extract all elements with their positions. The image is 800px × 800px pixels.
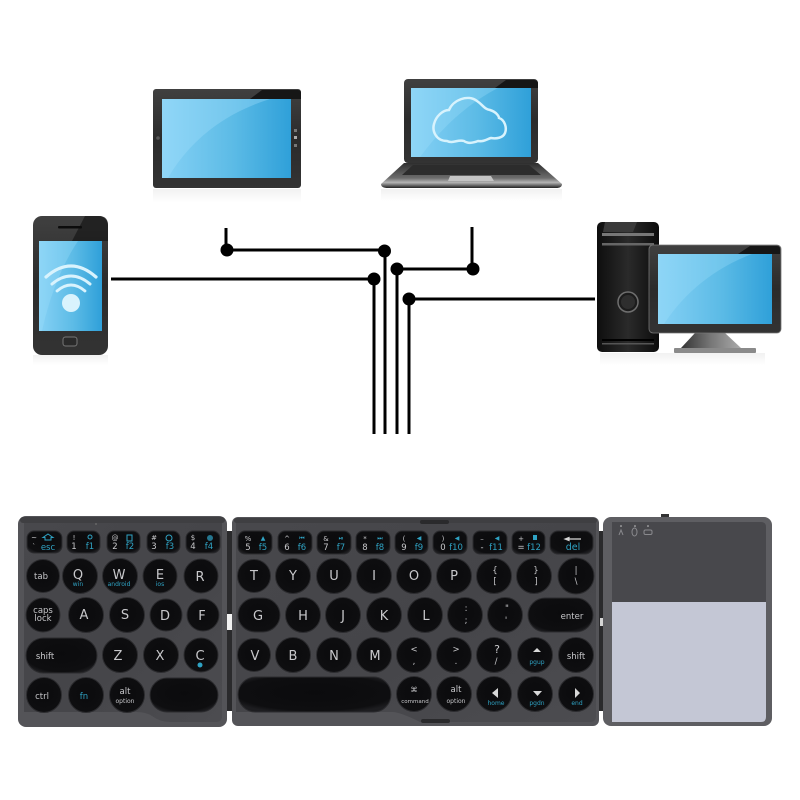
cloud outline [434,98,506,143]
function key row: f1 [86,542,94,552]
function key row: ⏯ [339,535,344,542]
key row: tab to R [26,558,218,594]
function key row: ⏭ [377,535,383,542]
function key row: # [151,534,157,542]
key row: tab to R: E [156,568,164,583]
key row: V to shift [238,638,594,672]
key row: space to arrows: alt [451,685,462,695]
icon: tablet [153,89,301,203]
key row: T to backslash: Y [288,569,297,584]
icon: smartphone with wifi [33,216,108,365]
key row: shift to C [26,638,218,673]
key row: shift to C: X [156,649,165,664]
key row: shift to C: Z [114,649,123,664]
key row: G to enter: ' [505,616,507,626]
key row: G to enter: J [340,609,345,624]
key row: ctrl to space: fn [80,692,88,702]
key row: T to backslash: I [372,569,376,584]
function key row: f9 [415,543,423,553]
function key row: f7 [337,543,345,553]
status indicators [619,525,652,536]
function key row: @ [112,534,118,542]
function key row: f10 [449,543,463,553]
key row: G to enter: : [465,604,467,614]
key row: G to enter: K [380,609,389,624]
key row: tab to R: ios [156,581,164,588]
key row: caps lock to F: S [121,608,129,623]
key row: caps lock to F [26,598,219,632]
key row: tab to R: win [73,581,83,588]
function key row: ◀ [495,535,500,542]
key row: space to arrows: command [401,699,429,705]
function key row: * [363,535,367,543]
key row: T to backslash: ] [534,577,538,587]
function key row: f2 [126,542,134,552]
panel: left keyboard section [18,516,227,727]
panel: touchpad section [603,514,772,726]
function key row: del [566,542,580,553]
function key row: f12 [527,543,541,553]
function key row: 2 [112,542,118,552]
function key row: 0 [440,543,446,553]
function key row: = [517,543,525,553]
key row: T to backslash: T [249,569,258,584]
key row: V to shift: . [455,657,457,667]
key row: G to enter: " [505,604,509,614]
key row: caps lock to F: lock [34,614,52,624]
key row: caps lock to F: F [198,609,206,624]
function key row: $ [191,534,195,542]
function key row: ! [73,534,75,542]
key row: shift to C: shift [36,652,55,662]
function key row: f3 [166,542,174,552]
icon: desktop tower and monitor [597,222,781,365]
key row: space to arrows: home [487,700,505,707]
key row: tab to R: W [113,568,126,583]
function key row: f4 [205,542,213,552]
function key row: ▲ [261,535,266,542]
wifi symbol [46,266,96,312]
folding keyboard [18,514,772,727]
key row: V to shift: / [495,657,498,667]
function key row: % [245,535,252,543]
key row: caps lock to F: D [160,609,170,624]
key row: tab to R: android [108,581,131,588]
key row: G to enter: G [253,609,263,624]
function key row: 9 [401,543,407,553]
function key row: ) [442,535,445,543]
key row: ctrl to space: alt [120,687,131,697]
key row: caps lock to F: caps [33,606,53,616]
function key row: esc [41,543,55,553]
function key row: 4 [190,542,196,552]
key row: T to backslash: P [450,569,458,584]
key row: V to shift: B [289,649,297,664]
key row: tab to R: Q [73,568,83,583]
key row: caps lock to F: A [80,608,89,623]
function key row: 5 [245,543,251,553]
key row: V to shift: N [329,649,339,664]
key row: ctrl to space [26,678,218,712]
key row: V to shift: ? [494,643,500,656]
key row: ctrl to space: option [116,698,135,705]
function key row: f6 [298,543,306,553]
function key row: ^ [284,535,290,543]
key row: space to arrows [238,676,594,712]
function key row: – [480,535,484,543]
function key row: - [480,543,484,553]
function key row [238,531,593,554]
function key row: 1 [71,542,77,552]
key row: T to backslash: [ [493,577,497,587]
key row: shift to C: C [195,649,205,664]
function key row: 7 [323,543,329,553]
key row: G to enter: H [298,609,308,624]
function key row: 6 [284,543,290,553]
key row: V to shift: , [413,657,415,667]
key row: T to backslash: \ [575,577,578,587]
key row: V to shift: pgup [529,659,545,666]
function key row: & [323,535,329,543]
function key row: ◀ [417,535,422,542]
function key row: + [518,535,524,543]
key row: space to arrows: option [447,698,466,705]
key row: T to backslash: | [575,566,577,576]
key row: tab to R: tab [34,572,48,582]
key row: ctrl to space: ctrl [35,692,49,702]
key row: G to enter: ; [465,616,467,626]
panel: centre keyboard section [232,517,599,726]
key row: V to shift: shift [567,652,586,662]
function key row: ( [403,535,406,543]
key row: T to backslash: U [329,569,339,584]
icon: laptop with cloud [381,79,562,201]
key row: V to shift: > [452,645,460,655]
function key row: f11 [489,543,503,553]
key row: tab to R: R [195,570,205,585]
function key row: ◀ [455,535,460,542]
key row: G to enter [238,598,593,632]
function key row: f5 [259,543,267,553]
key row: T to backslash [238,558,594,594]
function key row: 8 [362,543,368,553]
key row: G to enter: enter [561,612,584,622]
function key row [27,531,220,553]
key row: T to backslash: O [409,569,419,584]
function key row: 3 [151,542,157,552]
key row: space to arrows: ⌘ [410,686,418,694]
key row: V to shift: < [410,645,418,655]
hinges [226,531,606,711]
function key row: ~ [31,534,37,542]
touch surface [612,602,766,722]
key row: space to arrows: end [571,700,583,707]
function key row: ` [32,543,36,551]
key row: T to backslash: } [533,566,539,576]
key row: G to enter: L [422,609,430,624]
key row: V to shift: V [251,649,260,664]
function key row: ⏮ [299,535,305,542]
connection wires [111,227,595,434]
key row: V to shift: M [369,649,381,664]
key row: T to backslash: { [492,566,498,576]
function key row: f8 [376,543,384,553]
key row: space to arrows: pgdn [529,700,545,707]
